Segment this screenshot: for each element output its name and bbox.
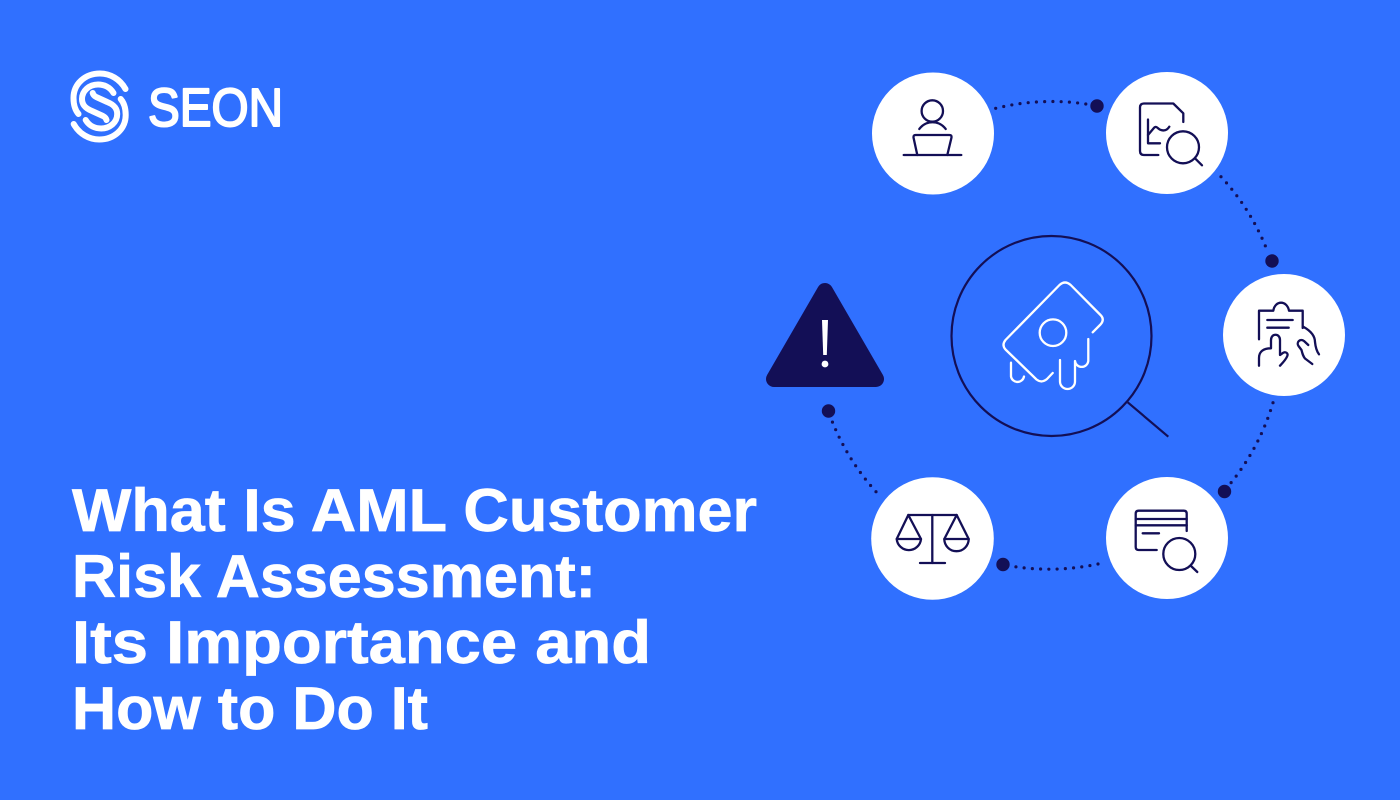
logo wordmark: SEON bbox=[148, 78, 283, 138]
icon: balance scales bbox=[871, 477, 994, 600]
icon: person at laptop bbox=[872, 72, 994, 194]
icon: warning triangle bbox=[774, 291, 876, 379]
title: What Is AML Customer bbox=[72, 477, 757, 544]
icon: clipboard with hands bbox=[1223, 274, 1345, 396]
magnifier lens and handle bbox=[952, 236, 1168, 437]
dotted ring connectors bbox=[822, 99, 1279, 571]
central magnifier with tag icon bbox=[952, 236, 1168, 437]
logo: SEON bbox=[74, 74, 283, 140]
title: Its Importance and bbox=[72, 609, 651, 676]
icon: card with magnifier bbox=[1106, 477, 1228, 599]
title bbox=[72, 477, 757, 742]
icon: document chart with magnifier bbox=[1106, 72, 1228, 194]
icon: SEON swirl mark bbox=[74, 74, 126, 140]
title: How to Do It bbox=[72, 675, 428, 742]
icon: dripping tag bbox=[1004, 282, 1103, 389]
title: Risk Assessment: bbox=[72, 543, 596, 610]
